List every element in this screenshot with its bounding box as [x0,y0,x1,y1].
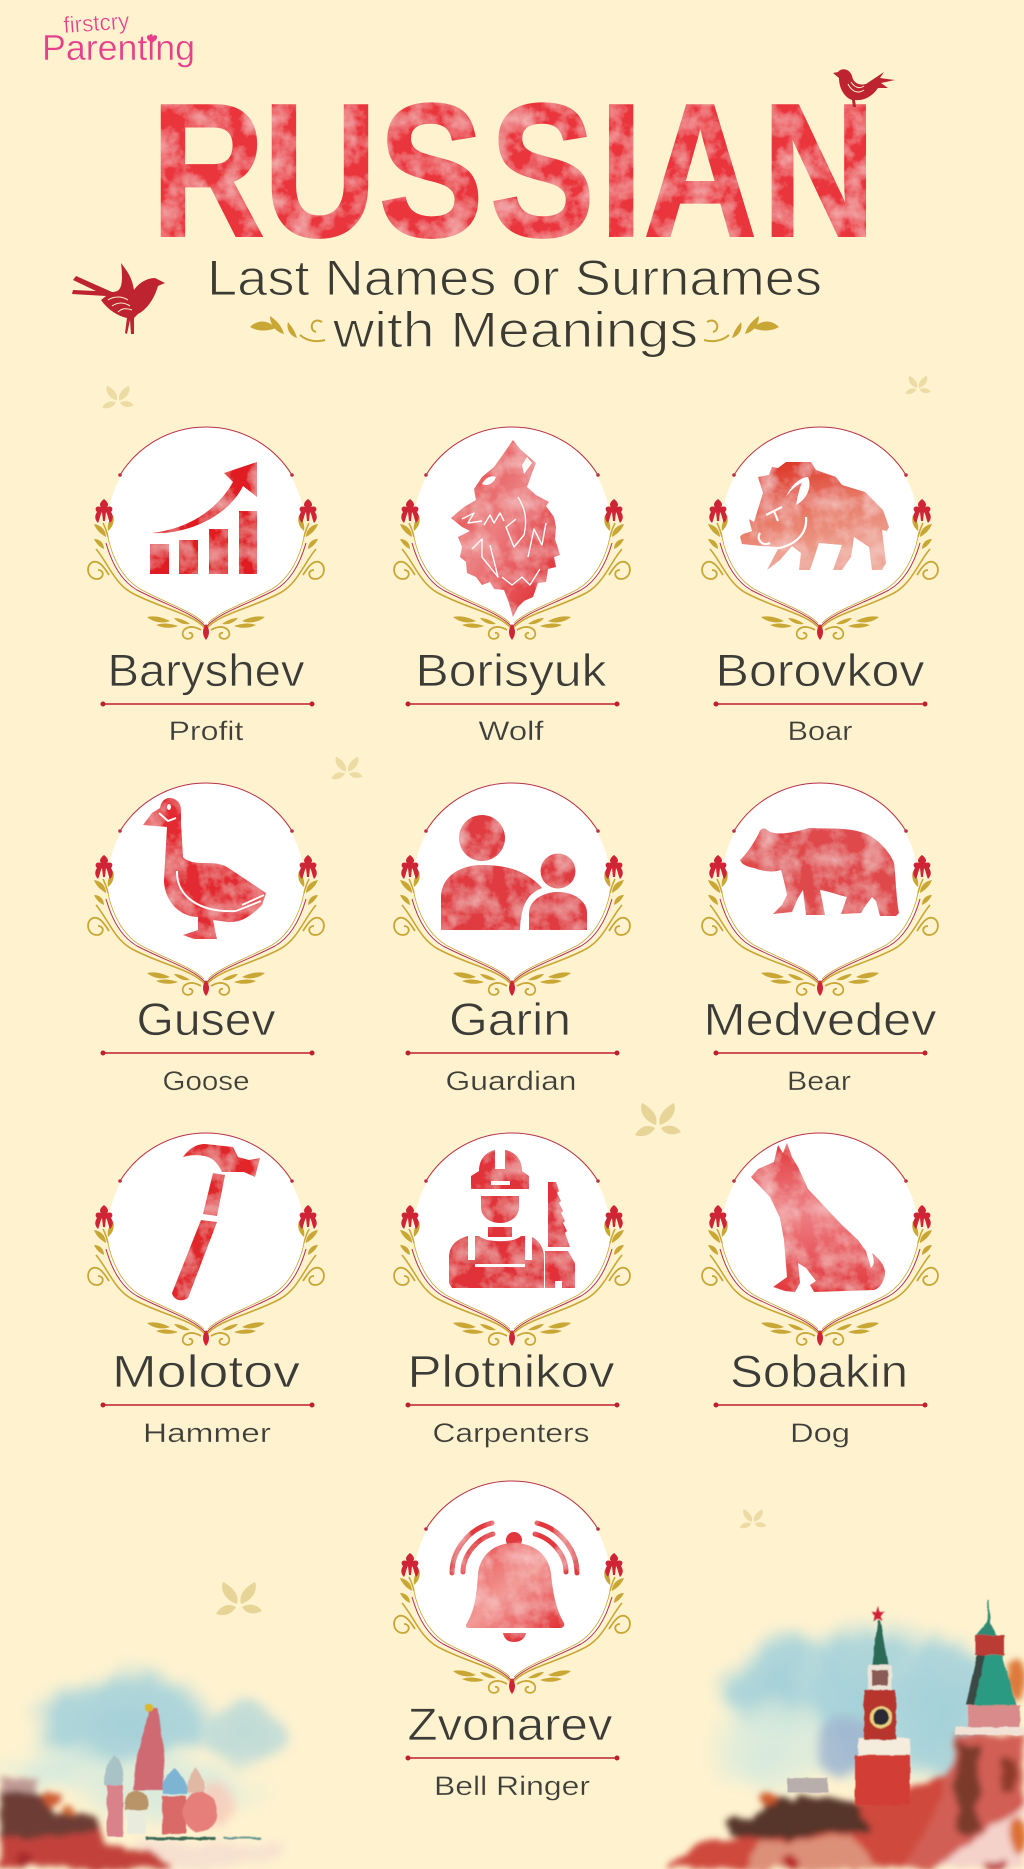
medallion frame [702,783,938,996]
meaning: Carpenters [432,1418,590,1448]
medallion frame [88,427,324,640]
surname: Sobakin [730,1346,908,1397]
logo: FirstCry Parenting: firstcry [63,7,131,38]
meaning: Guardian [446,1066,576,1096]
medallion frame [702,427,938,640]
logo: FirstCry Parenting: Parenting [42,27,195,68]
divider [714,1051,927,1055]
subtitle: with Meanings [332,302,698,358]
ornament: right flourish [704,316,779,341]
icon: hammer [172,1144,260,1300]
medallion frame [88,1133,324,1346]
surname: Borisyuk [416,645,607,696]
title: RUSSIAN: RUSSIAN [151,64,876,276]
subtitle: Last Names or Surnames [207,250,822,306]
meaning: Dog [790,1418,850,1448]
medallion frame [88,783,324,996]
icon: bear [740,828,899,916]
icon: carpenter [449,1150,575,1288]
panel: Molotov [88,1133,324,1448]
icon: boar [740,462,889,570]
icon: guardian [441,815,587,930]
panel: Plotnikov [394,1133,630,1448]
illustration: St Basil's Cathedral watercolour [0,1666,293,1869]
divider [406,702,619,706]
divider [714,1403,927,1407]
icon: flying bird [72,263,165,334]
panel: Gusev [88,783,324,1096]
divider [101,1051,314,1055]
icon: wolf [451,440,560,617]
meaning: Goose [162,1066,250,1096]
surname: Medvedev [704,994,937,1045]
medallion frame [702,1133,938,1346]
meaning: Profit [168,716,244,746]
divider [714,702,927,706]
divider [406,1756,619,1760]
surname: Borovkov [716,645,925,696]
panel: Baryshev [88,427,324,746]
surname: Zvonarev [408,1699,613,1750]
medallion frame [394,783,630,996]
logo: FirstCry Parenting [42,7,195,68]
medallion frame [394,1133,630,1346]
divider [406,1051,619,1055]
meaning: Hammer [143,1418,271,1448]
meaning: Wolf [478,716,544,746]
divider [406,1403,619,1407]
panel: Medvedev [702,783,938,1096]
icon: bird on title [833,69,895,107]
surname: Gusev [136,994,276,1045]
surname: Garin [449,994,571,1045]
panel: Borisyuk [394,427,630,746]
icon: goose [143,798,266,939]
illustration: Kremlin watercolour [668,1600,1024,1869]
icon: profit chart [150,462,257,574]
subtitle [207,250,822,358]
surname: Baryshev [108,645,305,696]
icon: bell [452,1523,577,1642]
medallion frame [394,1481,630,1694]
meaning: Bell Ringer [434,1771,590,1801]
panel: Zvonarev [394,1481,630,1801]
ornament: left flourish [250,316,325,341]
meaning: Boar [788,716,852,746]
icon: dog [751,1143,885,1292]
divider [101,702,314,706]
surname: Plotnikov [408,1346,615,1397]
panel: Borovkov [702,427,938,746]
medallion frame [394,427,630,640]
divider [101,1403,314,1407]
meaning: Bear [787,1066,851,1096]
surname: Molotov [112,1346,301,1397]
panel: Garin [394,783,630,1096]
panel: Sobakin [702,1133,938,1448]
decorative leaves [102,376,931,1615]
